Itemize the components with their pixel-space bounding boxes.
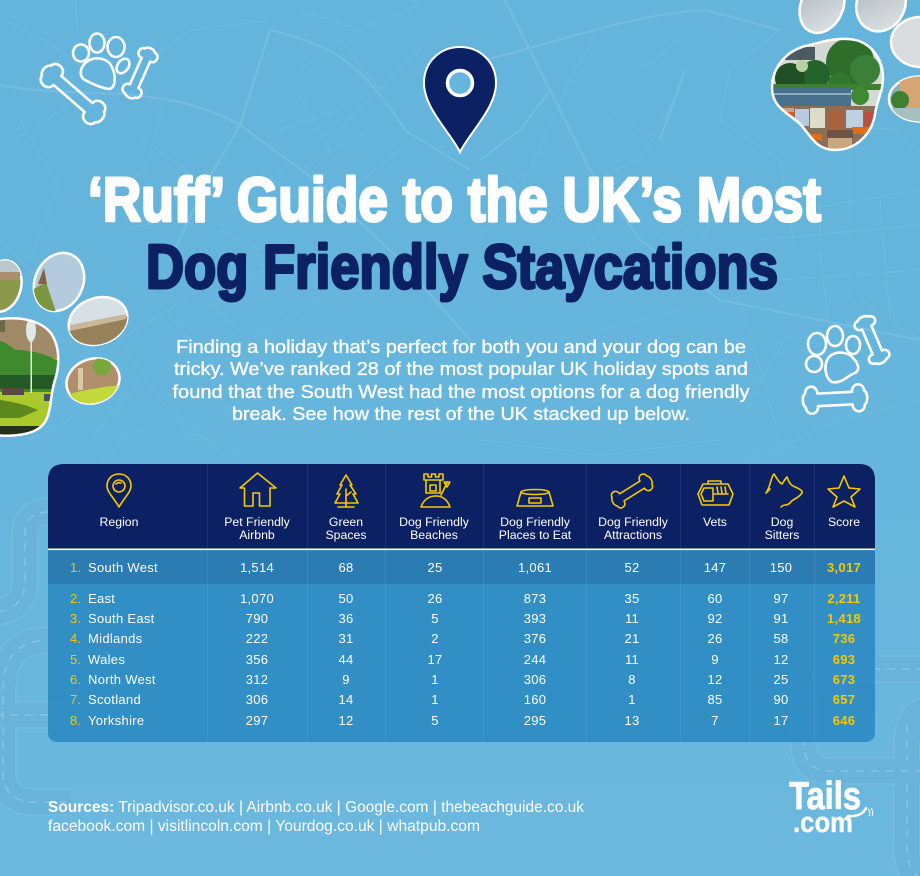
row: Midlands: 31: [338, 631, 354, 646]
icon: sandcastle: [421, 474, 450, 507]
row: Midlands: [70, 631, 855, 646]
column headers: Score: [828, 515, 860, 529]
row: Scotland: 306: [246, 692, 268, 707]
road decoration: left: [0, 512, 70, 802]
icon: map pin: [424, 47, 496, 152]
row: South West: South West: [88, 560, 158, 575]
background street map: [0, 0, 920, 460]
row: Scotland: 7.: [70, 692, 81, 707]
row: South West: 1,514: [240, 560, 274, 575]
icon: region pin: [107, 474, 131, 507]
row: East: 1,070: [240, 591, 274, 606]
row: South East: 393: [524, 611, 546, 626]
photo paw: top right: [765, 0, 920, 155]
column headers: Dog Friendly: [399, 515, 470, 529]
icon: dog bowl: [517, 490, 553, 506]
row: Midlands: 4.: [70, 631, 81, 646]
column headers: Dog: [771, 515, 793, 529]
logo: Tails.com: [789, 775, 873, 839]
row: South East: 1,418: [827, 611, 861, 626]
row: North West: North West: [88, 672, 156, 687]
row: East: 26: [427, 591, 443, 606]
intro paragraph: found that the South West had the most options for a dog friendly: [172, 381, 750, 402]
row: North West: 8: [628, 672, 636, 687]
row: South West: 150: [770, 560, 792, 575]
column headers: Spaces: [325, 528, 367, 542]
sources: [48, 799, 584, 835]
column headers: Sitters: [765, 528, 799, 542]
row: East: 60: [707, 591, 723, 606]
row: Wales: 5.: [70, 652, 81, 667]
row: South West: 3,017: [827, 560, 861, 575]
row: East: 2,211: [827, 591, 861, 606]
row: Midlands: 26: [707, 631, 723, 646]
row: Yorkshire: 5: [431, 713, 439, 728]
icon: house: [240, 473, 276, 506]
column headers: Attractions: [604, 528, 662, 542]
row: Yorkshire: 8.: [70, 713, 81, 728]
column headers: Dog Friendly: [500, 515, 571, 529]
row: Wales: 17: [427, 652, 443, 667]
row: South West: [70, 560, 861, 575]
row: South West: 147: [704, 560, 726, 575]
row: South West: 52: [624, 560, 640, 575]
row: South East: 11: [625, 611, 639, 626]
row: South East: 36: [338, 611, 354, 626]
row: Wales: 693: [833, 652, 855, 667]
column headers: Pet Friendly: [224, 515, 291, 529]
row: South West: 1.: [70, 560, 81, 575]
row: Yorkshire: 297: [246, 713, 268, 728]
icon: dog head: [766, 474, 802, 507]
intro paragraph: tricky. We’ve ranked 28 of the most popular UK holiday spots and: [174, 358, 748, 379]
icon: paw and bones right: [802, 313, 892, 414]
row: North West: 673: [833, 672, 855, 687]
row: East: [70, 591, 861, 606]
row: Scotland: 1: [628, 692, 636, 707]
row: Wales: 356: [246, 652, 268, 667]
sources: facebook.com | visitlincoln.com | Yourdog.co.uk | whatpub.com: [48, 818, 480, 835]
data table: [48, 464, 875, 742]
row: Midlands: 736: [833, 631, 855, 646]
row: East: 97: [773, 591, 789, 606]
photo paw: left: [0, 245, 134, 440]
table body background: [48, 549, 875, 742]
row: Midlands: 21: [624, 631, 640, 646]
row: Scotland: 1: [431, 692, 439, 707]
title line 1: ‘Ruff’ Guide to the UK’s Most: [88, 166, 821, 235]
row: North West: 312: [246, 672, 268, 687]
row: Scotland: 90: [773, 692, 789, 707]
icon: star: [828, 476, 860, 507]
intro paragraph: [172, 336, 750, 424]
row: Wales: 12: [773, 652, 789, 667]
row: Midlands: 222: [246, 631, 268, 646]
highlighted row background: [48, 550, 875, 584]
row: East: 50: [338, 591, 354, 606]
row: Midlands: Midlands: [88, 631, 143, 646]
row: Wales: 9: [711, 652, 719, 667]
row: East: 2.: [70, 591, 81, 606]
column headers: Beaches: [410, 528, 458, 542]
icon: tree: [335, 475, 358, 507]
row: North West: 25: [773, 672, 789, 687]
column headers: Region: [100, 515, 139, 529]
row: Scotland: 657: [833, 692, 855, 707]
row: Yorkshire: Yorkshire: [88, 713, 144, 728]
row: North West: 9: [342, 672, 350, 687]
row: Wales: 44: [338, 652, 354, 667]
row: Scotland: 160: [524, 692, 546, 707]
row: Yorkshire: 646: [833, 713, 855, 728]
row: South East: 3.: [70, 611, 81, 626]
row: South West: 1,061: [518, 560, 552, 575]
table header background: [48, 464, 875, 549]
column headers: Vets: [703, 515, 727, 529]
column headers: Green: [329, 515, 363, 529]
icon: bone: [608, 472, 656, 510]
row: South East: 91: [773, 611, 789, 626]
row: Yorkshire: 12: [338, 713, 354, 728]
row: Midlands: 58: [773, 631, 789, 646]
row: South East: [70, 611, 861, 626]
row: Yorkshire: 13: [624, 713, 640, 728]
intro paragraph: break. See how the rest of the UK stacked up below.: [232, 403, 690, 424]
column headers: Airbnb: [239, 528, 275, 542]
row: Wales: Wales: [88, 652, 125, 667]
row: North West: 6.: [70, 672, 81, 687]
row: Wales: [70, 652, 855, 667]
row: Yorkshire: 7: [711, 713, 719, 728]
row: North West: 306: [524, 672, 546, 687]
row: Yorkshire: 295: [524, 713, 546, 728]
intro paragraph: Finding a holiday that’s perfect for both you and your dog can be: [176, 336, 746, 357]
row: East: 35: [624, 591, 640, 606]
row: South East: 92: [707, 611, 723, 626]
row: Scotland: [70, 692, 855, 707]
row: North West: 12: [707, 672, 723, 687]
row: South East: 5: [431, 611, 439, 626]
sources: Sources: Tripadvisor.co.uk | Airbnb.co.uk | Google.com | thebeachguide.co.uk: [48, 799, 584, 816]
row: South East: 790: [246, 611, 268, 626]
row: Scotland: 85: [707, 692, 723, 707]
column headers: Places to Eat: [499, 528, 572, 542]
row: East: 873: [524, 591, 546, 606]
logo: Tails.com: Tails: [789, 775, 861, 818]
icon: pet carrier: [698, 481, 733, 505]
row: South West: 25: [427, 560, 443, 575]
row: Yorkshire: 17: [773, 713, 789, 728]
row: South East: South East: [88, 611, 155, 626]
icon: paw and bones top left: [36, 34, 160, 129]
row: East: East: [88, 591, 115, 606]
row: Midlands: 376: [524, 631, 546, 646]
row: Scotland: 14: [338, 692, 354, 707]
logo: Tails.com: .com: [793, 807, 853, 839]
row: North West: 1: [431, 672, 439, 687]
column headers: [100, 515, 860, 542]
row: Scotland: Scotland: [88, 692, 141, 707]
row: North West: [70, 672, 855, 687]
row: Wales: 244: [524, 652, 546, 667]
row: Midlands: 2: [431, 631, 439, 646]
row: South West: 68: [338, 560, 354, 575]
row: Wales: 11: [625, 652, 639, 667]
row: Yorkshire: [70, 713, 855, 728]
column headers: Dog Friendly: [598, 515, 669, 529]
title line 2: Dog Friendly Staycations: [146, 233, 778, 302]
road decoration: right: [804, 669, 920, 876]
